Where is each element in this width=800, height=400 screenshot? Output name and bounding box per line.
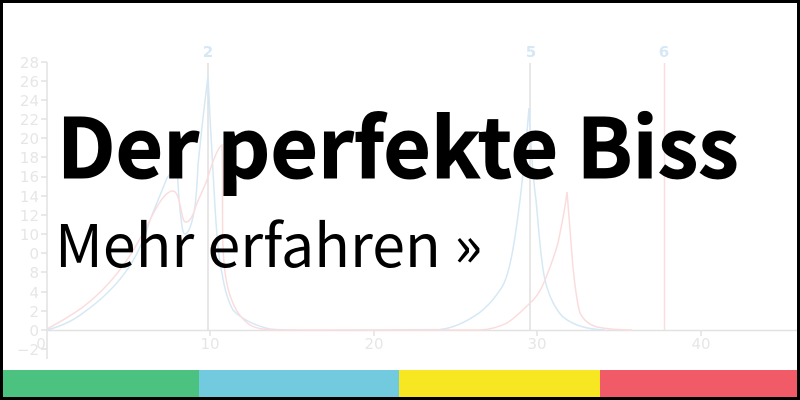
- y axis: 2: [29, 303, 39, 321]
- subtitle link: Mehr erfahren »: [55, 199, 482, 284]
- y axis: 0: [29, 245, 39, 263]
- blue curve: [47, 76, 605, 330]
- x axis: 20: [364, 335, 384, 353]
- marker labels: 2: [203, 43, 213, 61]
- y axis: 26: [20, 73, 39, 91]
- y axis: 18: [20, 149, 39, 167]
- color bar: blue: [199, 370, 399, 397]
- title: Der perfekte Biss: [57, 83, 739, 202]
- color bar: green: [3, 370, 199, 397]
- y axis: 16: [20, 168, 39, 186]
- x axis: 0: [36, 335, 46, 353]
- marker lines: [208, 63, 664, 330]
- x axis: 40: [691, 335, 711, 353]
- x axis: 30: [527, 335, 547, 353]
- y axis: 10: [20, 226, 39, 244]
- pink curve: [47, 145, 632, 330]
- y axis: 4: [29, 284, 39, 302]
- marker labels: [203, 43, 669, 61]
- y axis: −2: [17, 341, 39, 359]
- y axis: 12: [20, 207, 39, 225]
- y axis: 14: [20, 188, 39, 206]
- y axis: 24: [20, 92, 39, 110]
- y axis: 0: [29, 322, 39, 340]
- x axis: [36, 330, 797, 353]
- marker labels: 6: [659, 43, 669, 61]
- color bar: red: [600, 370, 797, 397]
- y axis: 20: [20, 130, 39, 148]
- y axis: [17, 54, 47, 359]
- y axis: 22: [20, 111, 39, 129]
- color bar: yellow: [399, 370, 600, 397]
- y axis: 8: [29, 264, 39, 282]
- marker labels: 5: [526, 43, 536, 61]
- y axis: 28: [20, 54, 39, 72]
- x axis: 10: [200, 335, 220, 353]
